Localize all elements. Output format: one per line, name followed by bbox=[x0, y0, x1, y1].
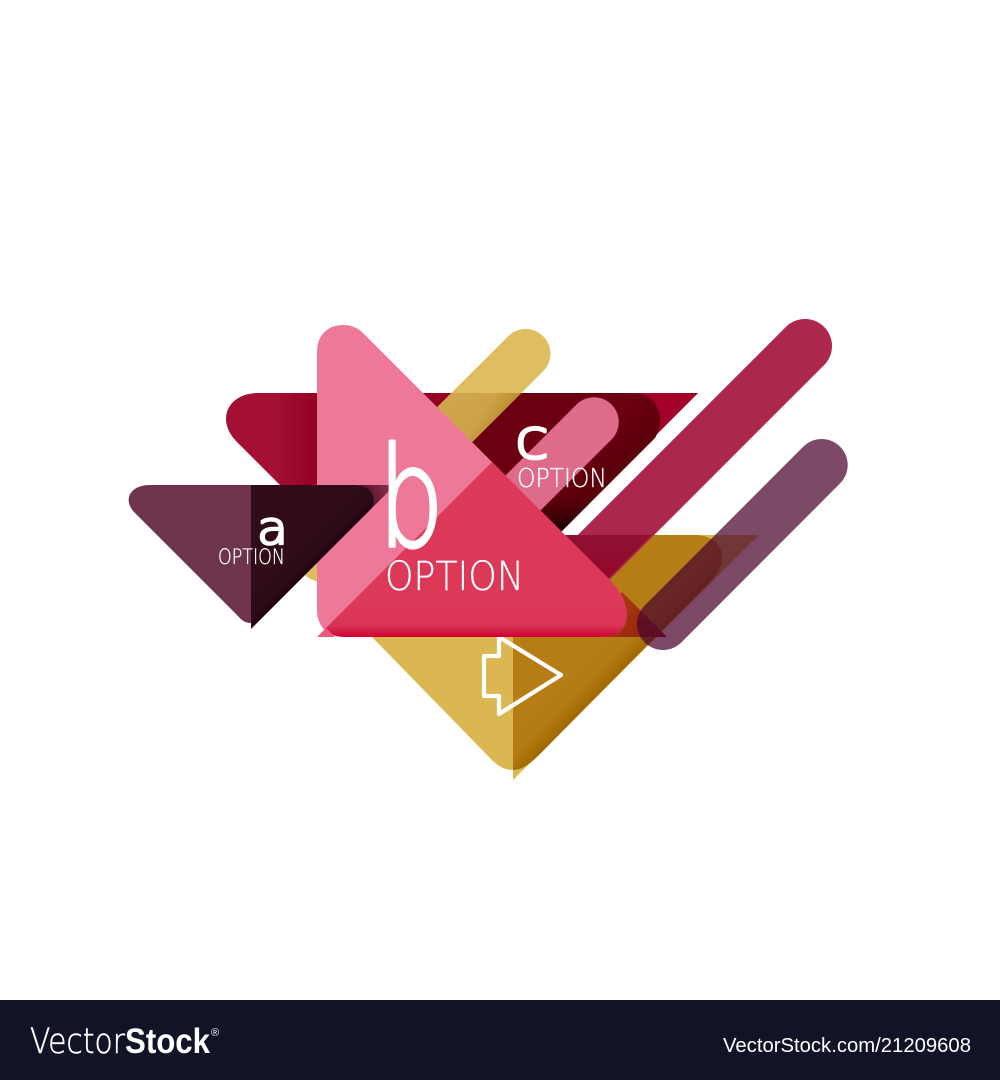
panel: c option red triangle bbox=[226, 393, 698, 648]
label: b: b bbox=[378, 418, 444, 579]
pink pill bbox=[470, 422, 594, 546]
icon: outlined arrow bbox=[484, 637, 561, 714]
footer logo: Vector bbox=[30, 1022, 126, 1062]
red diagonal pill bbox=[540, 346, 805, 597]
panel: a option dark triangle bbox=[129, 485, 395, 629]
label: a: a bbox=[257, 502, 288, 555]
registered mark: ® bbox=[211, 1027, 219, 1039]
purple diagonal pill bbox=[663, 465, 822, 624]
panel: gold triangle bbox=[372, 535, 759, 780]
footer bar bbox=[0, 1000, 1000, 1080]
label: a option: OPTION bbox=[218, 545, 285, 569]
label: b option: OPTION bbox=[385, 554, 524, 600]
yellow pill bbox=[322, 354, 526, 557]
footer logo: Stock bbox=[125, 1022, 210, 1061]
footer url: VectorStock.com/21209608 bbox=[723, 1035, 971, 1057]
label: c option: OPTION bbox=[517, 464, 607, 494]
label: c: c bbox=[515, 407, 549, 471]
panel: b option pink triangle bbox=[317, 325, 700, 637]
footer logo bbox=[30, 1022, 210, 1062]
